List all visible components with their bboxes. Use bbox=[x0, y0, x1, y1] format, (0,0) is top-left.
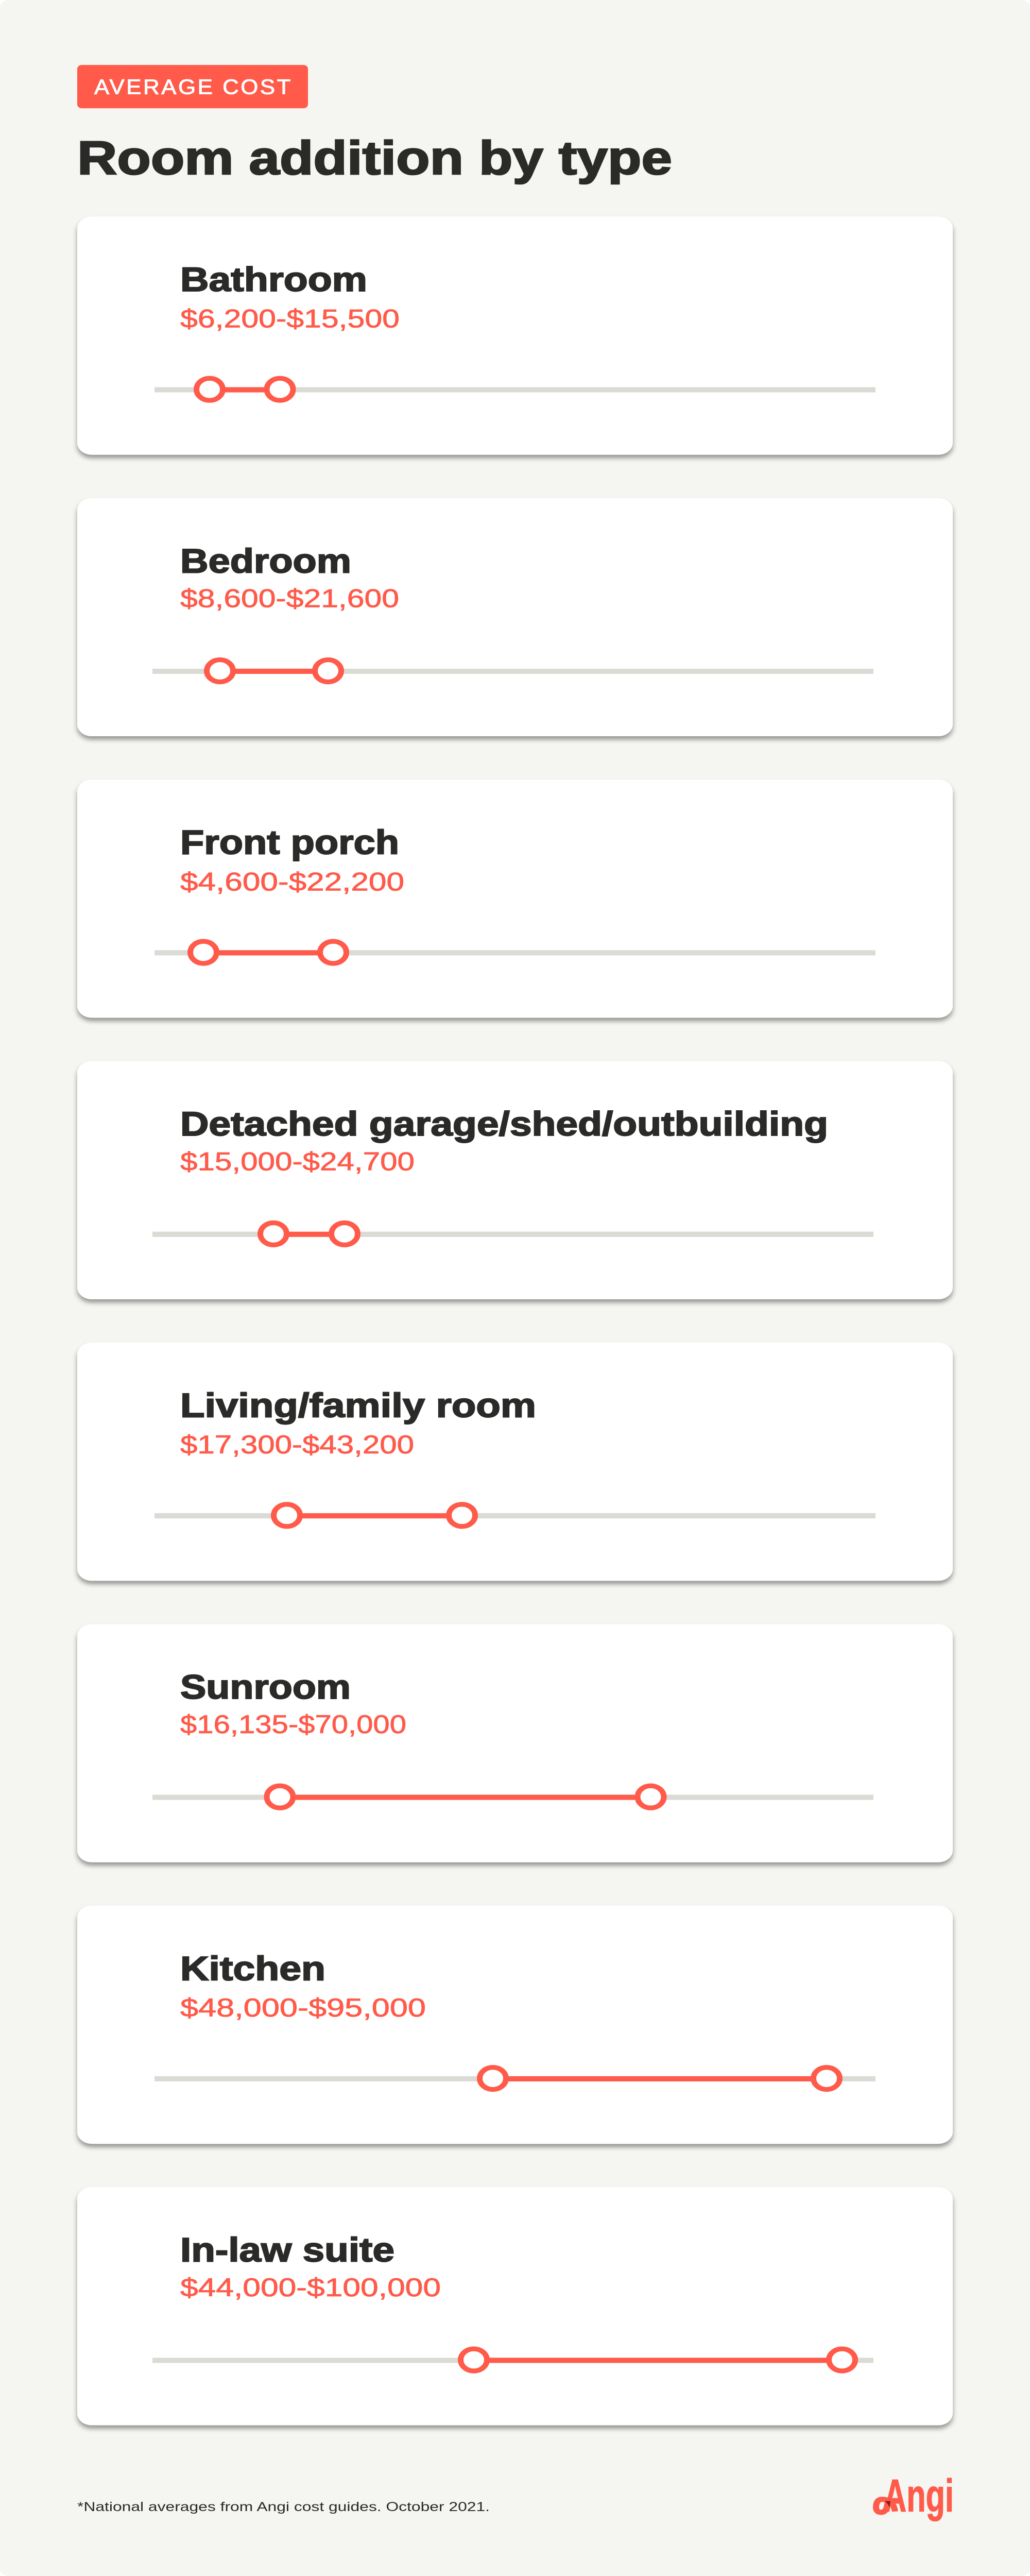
label: detached garage/shed/outbuilding: Detached garage/shed/outbuilding bbox=[180, 1106, 828, 1143]
label: bathroom: Bathroom bbox=[180, 261, 367, 298]
label: in-law suite: In-law suite bbox=[180, 2231, 394, 2269]
label: sunroom: Sunroom bbox=[180, 1669, 351, 1706]
panel: sunroom bbox=[77, 1624, 953, 1862]
panel: bedroom bbox=[77, 498, 953, 736]
cost: front porch: $4,600-$22,200 bbox=[180, 868, 404, 896]
range slider: detached garage/shed/outbuilding bbox=[152, 1223, 873, 1245]
badge: average cost: AVERAGE COST bbox=[94, 75, 293, 99]
logo: Angi: Angi bbox=[884, 2470, 954, 2521]
label: front porch: Front porch bbox=[180, 824, 399, 861]
range slider: in-law suite bbox=[152, 2349, 873, 2371]
range slider: front porch bbox=[154, 941, 876, 963]
panel: kitchen bbox=[77, 1906, 953, 2144]
cost: kitchen: $48,000-$95,000 bbox=[180, 1993, 426, 2022]
range slider: living/family room bbox=[154, 1504, 876, 1527]
panel: living/family room bbox=[77, 1343, 953, 1581]
panel: bathroom bbox=[77, 216, 953, 455]
panel: in-law suite bbox=[77, 2187, 953, 2425]
label: living/family room: Living/family room bbox=[180, 1387, 536, 1425]
footnote: *National averages from Angi cost guides. October 2021. bbox=[77, 2499, 490, 2514]
label: bedroom: Bedroom bbox=[180, 543, 351, 580]
cost: living/family room: $17,300-$43,200 bbox=[180, 1431, 414, 1459]
logo: Angi bbox=[876, 2470, 954, 2521]
cost: in-law suite: $44,000-$100,000 bbox=[180, 2273, 441, 2302]
panel: detached garage/shed/outbuilding bbox=[77, 1061, 953, 1299]
badge: average cost bbox=[77, 65, 308, 108]
panel: front porch bbox=[77, 779, 953, 1018]
range slider: bedroom bbox=[152, 660, 873, 682]
range slider: kitchen bbox=[154, 2067, 876, 2090]
cost: sunroom: $16,135-$70,000 bbox=[180, 1710, 406, 1739]
cost: bathroom: $6,200-$15,500 bbox=[180, 304, 400, 333]
cost: detached garage/shed/outbuilding: $15,000-$24,700 bbox=[180, 1147, 415, 1176]
label: kitchen: Kitchen bbox=[180, 1950, 325, 1988]
range slider: bathroom bbox=[154, 378, 876, 400]
title: Room addition by type bbox=[77, 132, 672, 184]
range slider: sunroom bbox=[152, 1786, 873, 1808]
cost: bedroom: $8,600-$21,600 bbox=[180, 584, 399, 613]
